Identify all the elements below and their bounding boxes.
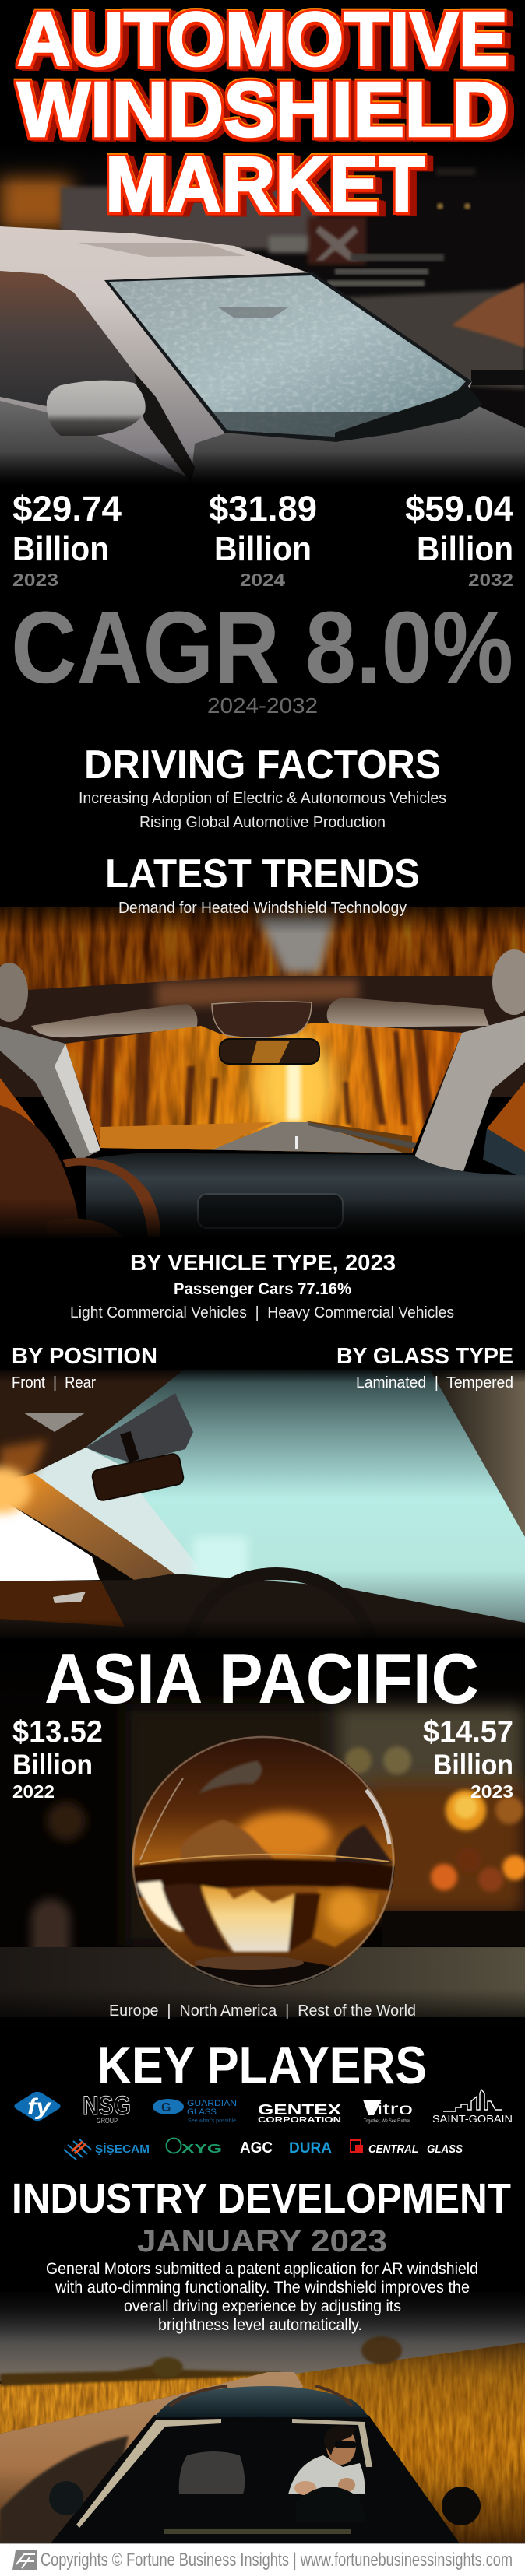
grab handles (0, 963, 28, 1022)
latest trends: LATEST TRENDS (105, 851, 420, 897)
left field (0, 2372, 266, 2434)
air vent (198, 1194, 343, 1228)
driving factors: Rising Global Automotive Production (139, 814, 386, 831)
logo: Guardian Glass: GLASS (187, 2107, 217, 2117)
by glass type (336, 1344, 513, 1392)
seat (179, 2451, 245, 2494)
logo: Fuyao (12, 2090, 63, 2122)
driving factors: Increasing Adoption of Electric & Autonomous Vehicles (79, 790, 446, 807)
continents (181, 1820, 279, 1864)
stat: 2032 market size: Billion (417, 530, 513, 568)
photo: fogged windshield interior (0, 1366, 525, 1644)
logo: Sisecam (64, 2139, 150, 2160)
windshield light strips (76, 2419, 221, 2528)
side mirror (47, 381, 146, 436)
tree lines (0, 2366, 280, 2386)
logo: XYG (167, 2139, 222, 2156)
logo: NSG Group: NSG (83, 2091, 131, 2121)
right field (296, 2339, 525, 2545)
logo: Saint-Gobain (432, 2090, 513, 2125)
logo: Guardian Glass: G (161, 2101, 171, 2114)
stat: Asia Pacific 2023: 2023 (470, 1781, 513, 1802)
logo: Fuyao: fy (27, 2094, 51, 2120)
key players heading: KEY PLAYERS (97, 2036, 427, 2095)
by vehicle type: BY VEHICLE TYPE, 2023 (130, 1251, 396, 1276)
photo: frosted windshield car (0, 144, 525, 486)
stat: 2023 market size: $29.74 (12, 489, 122, 528)
console and rear-view mirror (212, 1002, 312, 1038)
stat: Asia Pacific 2022: $13.52 (12, 1715, 103, 1749)
side window glare (0, 1498, 100, 1581)
logo: Central Glass (351, 2140, 463, 2156)
dashboard (86, 1153, 525, 1238)
industry development text: overall driving experience by adjusting its (124, 2297, 401, 2315)
stat: 2024 market size: $31.89 (209, 489, 317, 528)
stat: 2023 market size (12, 489, 122, 590)
left pillar (0, 1473, 174, 1580)
logo: Vitro (363, 2100, 413, 2124)
icon: Fortune Business Insights logo (12, 2550, 37, 2570)
region heading: Asia Pacific: ASIA PACIFIC (44, 1640, 479, 1718)
logos row 2 (64, 2139, 463, 2160)
by vehicle type (70, 1251, 454, 1321)
title (17, 0, 508, 228)
logo: AGC: AGC (240, 2139, 273, 2157)
driving factors (79, 742, 446, 831)
latest trends: Demand for Heated Windshield Technology (118, 900, 407, 917)
windshield with frost (101, 272, 483, 444)
title: WINDSHIELD (17, 66, 508, 153)
car side window (0, 271, 137, 406)
stat: 2023 market size: Billion (12, 530, 109, 568)
headliner and sun visor (86, 1393, 193, 1463)
base (192, 1961, 335, 1988)
photo: driver in car on country road (0, 2284, 525, 2545)
logo: Vitro: Together, We See Further (364, 2119, 410, 2124)
by glass type: BY GLASS TYPE (336, 1344, 513, 1369)
car roof (154, 2386, 368, 2417)
equator band (132, 1858, 397, 1899)
bokeh lights (345, 1746, 525, 1892)
logo: Central Glass: GLASS (427, 2143, 463, 2156)
stat: Asia Pacific 2022 (12, 1715, 103, 1802)
table surface (0, 1947, 525, 2017)
stat: Asia Pacific 2023: $14.57 (423, 1715, 513, 1749)
car hood (0, 401, 525, 486)
other regions: Europe | North America | Rest of the World (109, 2002, 416, 2020)
by position: BY POSITION (12, 1344, 157, 1369)
stat: 2024 market size: 2024 (240, 570, 285, 590)
title: MARKET (105, 141, 425, 228)
logos row 1 (12, 2090, 513, 2125)
rear-view mirror (91, 1453, 185, 1501)
industry development heading (12, 2175, 511, 2258)
car body (51, 2415, 460, 2543)
stat: 2032 market size: 2032 (468, 570, 513, 590)
logo: Guardian Glass: See what's possible (188, 2118, 236, 2124)
stat: Asia Pacific 2023 (423, 1715, 513, 1802)
car roof (0, 226, 472, 483)
stat: Asia Pacific 2022: Billion (12, 1749, 93, 1781)
right pillar (430, 1370, 525, 1537)
photo: car interior autumn road (0, 895, 525, 1241)
logo: Gentex (258, 2102, 341, 2125)
lower bright reflection (137, 1881, 198, 1932)
industry development heading: JANUARY 2023 (137, 2224, 387, 2258)
windshield view: forest (62, 1020, 467, 1156)
driving factors: DRIVING FACTORS (84, 742, 441, 788)
logo: Central Glass: CENTRAL (368, 2143, 418, 2156)
driver (288, 2425, 365, 2495)
by position: Front | Rear (12, 1374, 96, 1392)
logo: Vitro: itro (377, 2100, 413, 2118)
stat: 2032 market size: $59.04 (405, 489, 513, 528)
steering wheel (62, 1158, 160, 1237)
CAGR: 2024-2032 (207, 693, 318, 718)
logo: Sisecam: ŞİŞECAM (95, 2143, 150, 2156)
steering wheel (187, 1574, 372, 1642)
road (0, 2372, 303, 2543)
stat: 2032 market size (405, 489, 513, 590)
stat: Asia Pacific 2023: Billion (433, 1749, 513, 1781)
logo: XYG: XYG (181, 2143, 222, 2156)
sun visors (31, 1004, 198, 1037)
footer (0, 2543, 525, 2576)
industry development text: with auto-dimming functionality. The windshield improves the (55, 2279, 470, 2297)
dashboard (0, 1574, 525, 1642)
photo: crystal globe with bokeh (0, 1638, 525, 2035)
stat: 2024 market size (209, 489, 317, 590)
stat: Asia Pacific 2022: 2022 (12, 1781, 55, 1802)
stat: 2023 market size: 2023 (12, 570, 58, 590)
logo: Guardian Glass: GUARDIAN (187, 2099, 237, 2108)
industry development text: General Motors submitted a patent application for AR windshield (46, 2260, 478, 2278)
stat: 2024 market size: Billion (214, 530, 312, 568)
industry development text: brightness level automatically. (158, 2316, 362, 2334)
industry development text (46, 2260, 478, 2334)
logo: Saint-Gobain: SAINT-GOBAIN (432, 2113, 513, 2125)
logo: Gentex: GENTEX (258, 2102, 341, 2118)
wing mirrors (44, 2476, 88, 2520)
logo: Gentex: CORPORATION (258, 2116, 341, 2125)
by glass type: Laminated | Tempered (356, 1374, 513, 1392)
car shadow (0, 2436, 129, 2543)
logo: Guardian Glass (153, 2099, 237, 2124)
by vehicle type: Passenger Cars 77.16% (174, 1280, 351, 1298)
headliner (0, 961, 525, 1097)
by position (12, 1344, 157, 1392)
globe (132, 1735, 397, 1994)
A-pillars (0, 1026, 100, 1161)
logo: NSG Group: GROUP (97, 2117, 118, 2125)
logo: Dura: DURA (289, 2140, 332, 2157)
latest trends (105, 851, 420, 917)
by vehicle type: Light Commercial Vehicles | Heavy Commercial Vehicles (70, 1304, 454, 1321)
